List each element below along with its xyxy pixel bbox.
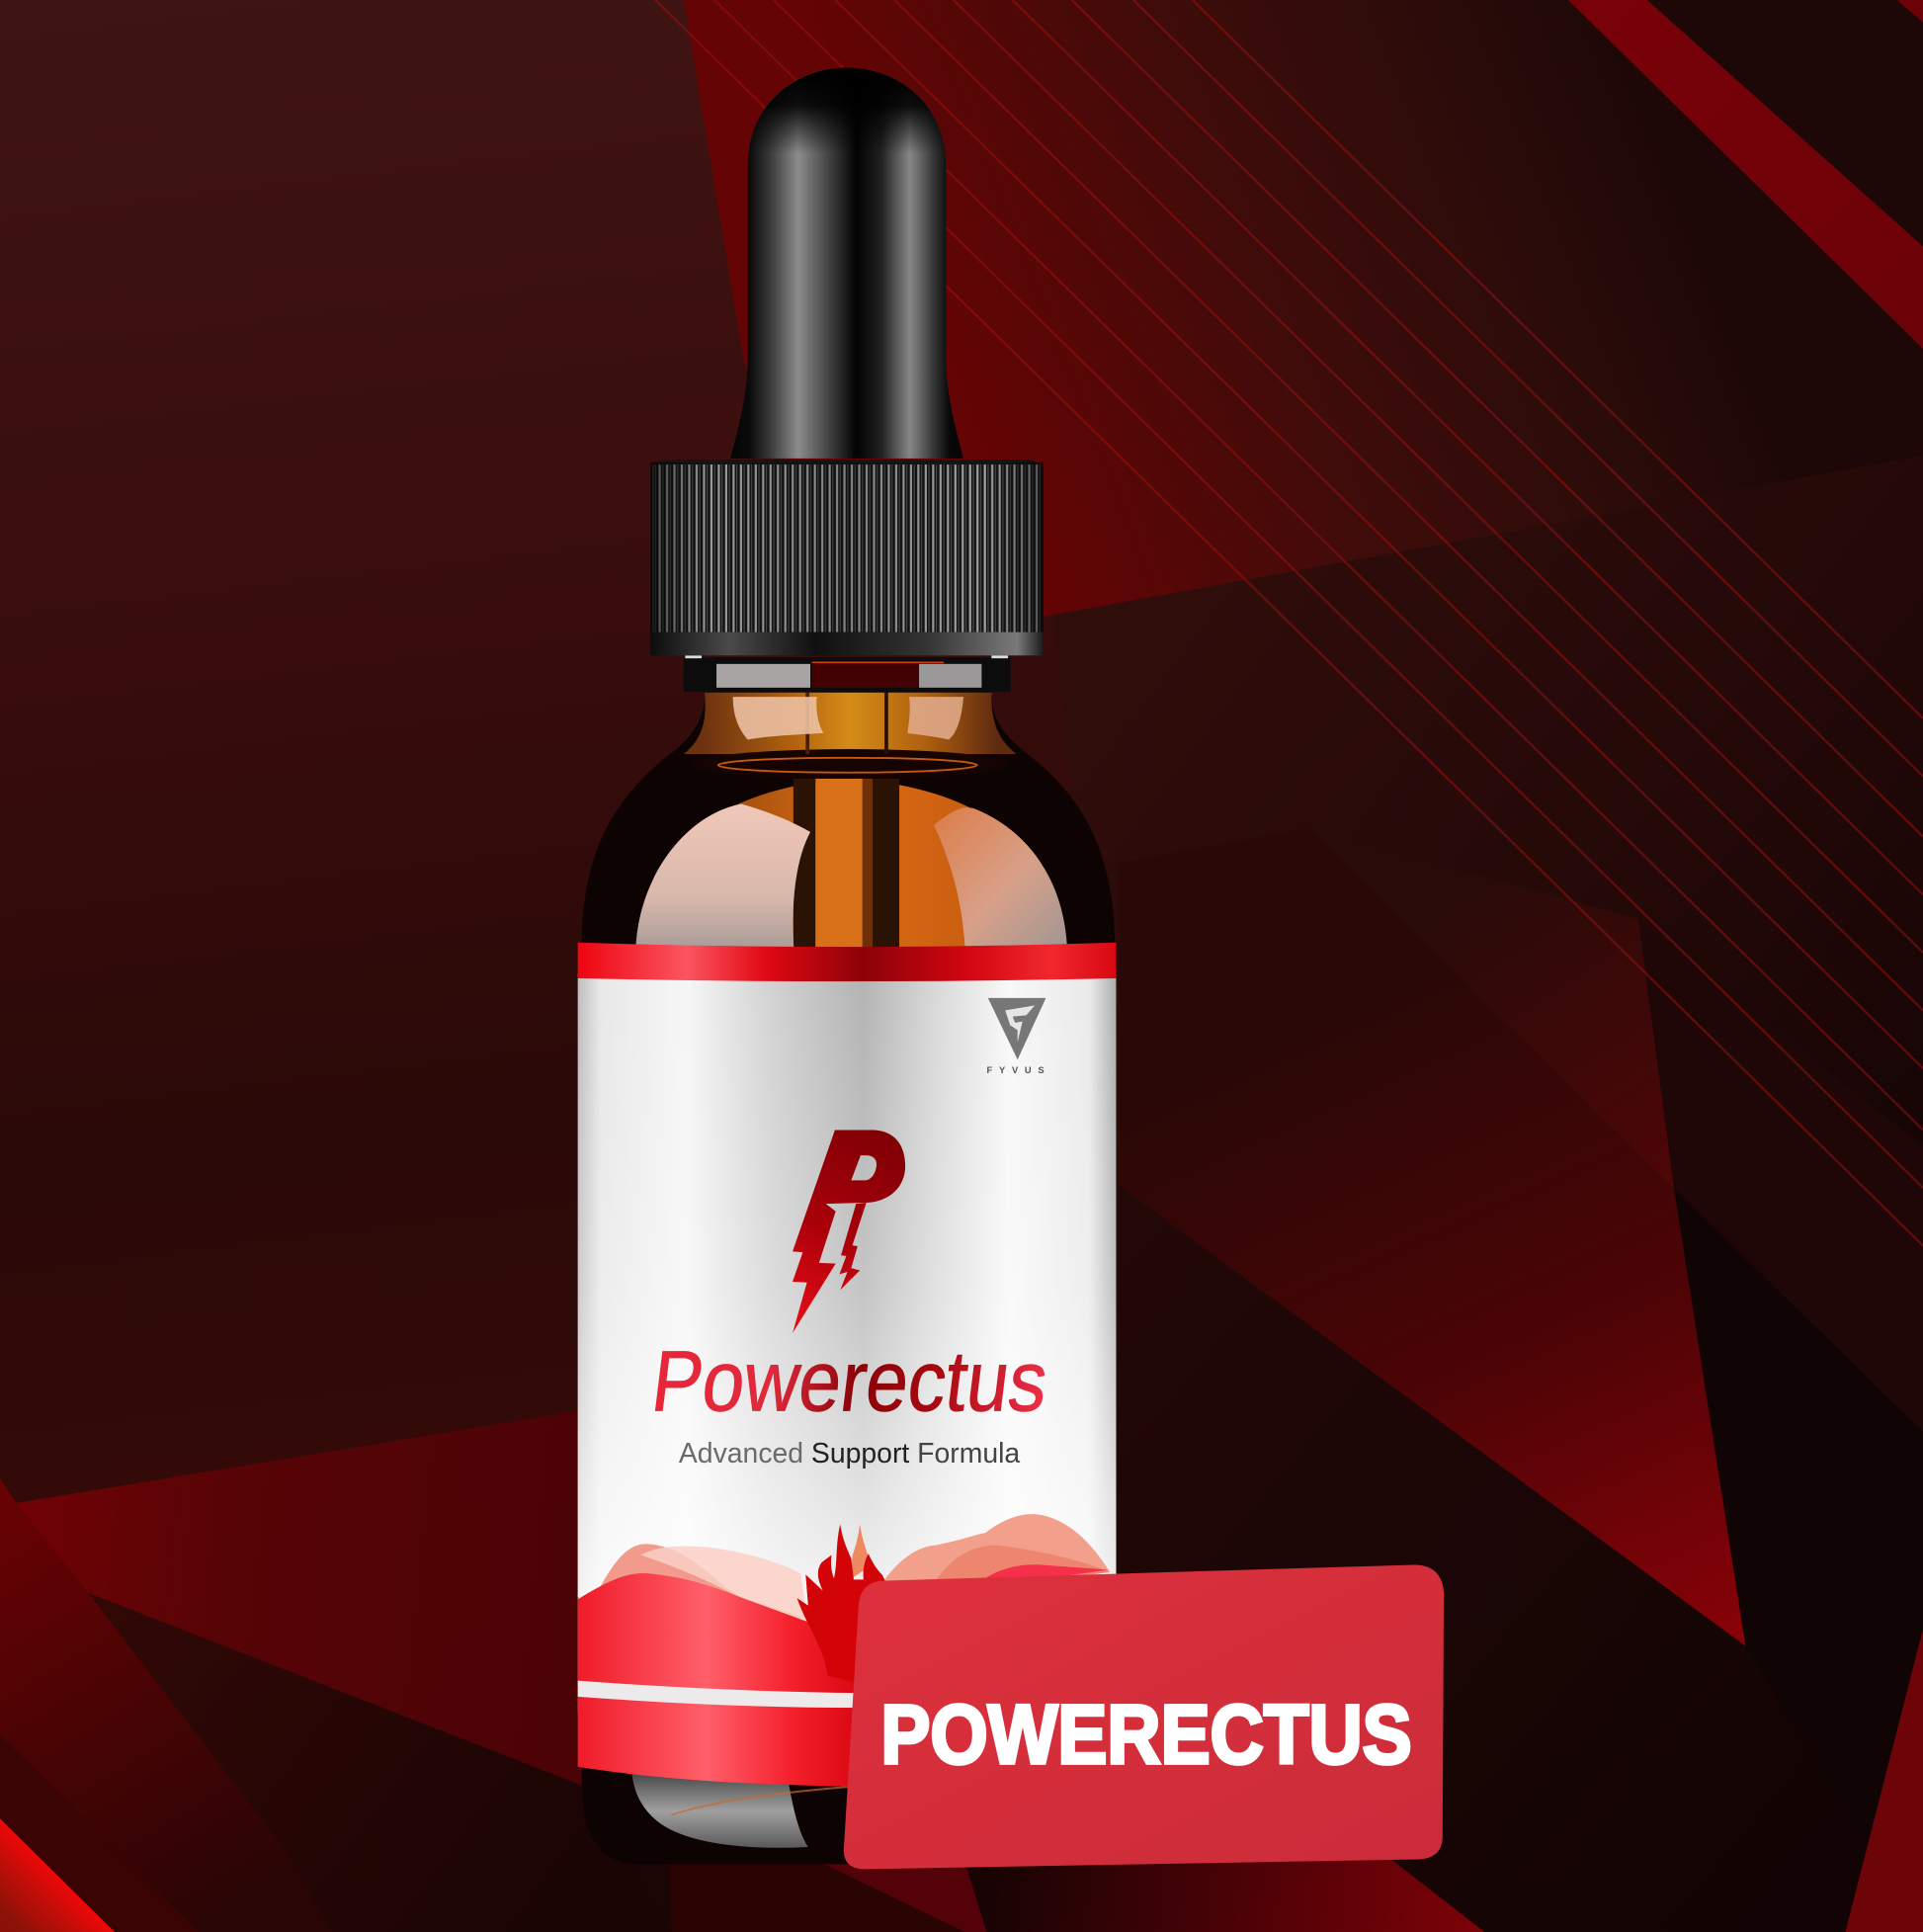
top right red band (1568, 0, 1923, 349)
pale waves (599, 1514, 1110, 1638)
bottom left corner red (0, 1818, 115, 1932)
bottom centre facets (669, 1858, 1484, 1932)
top red band (578, 943, 1116, 981)
dropper bulb (730, 68, 963, 459)
top right corner red (1897, 0, 1923, 22)
top red facet (684, 0, 1923, 640)
right dark facet (1638, 919, 1923, 1432)
red card (844, 1564, 1444, 1869)
white stripe (578, 1681, 863, 1708)
glass body (581, 688, 1115, 1864)
ribbed cap (650, 460, 1044, 655)
brand mark FYVUS (987, 998, 1050, 1075)
bottom left dark facet (89, 1593, 671, 1932)
flame (797, 1524, 889, 1691)
lower right dark facet (1674, 1189, 1923, 1932)
red lower wave (578, 1573, 863, 1787)
upper red triangle (1309, 828, 1674, 1189)
bottle (578, 68, 1116, 1864)
glass highlights (635, 697, 1067, 949)
diagonal lines (655, 0, 1923, 1246)
neck ring (684, 655, 1011, 692)
bottom left band (0, 1735, 199, 1932)
base highlight (632, 1774, 808, 1848)
product name: Powerectus (647, 1333, 1053, 1430)
central red triangle (1119, 828, 1745, 1646)
lower dark facet (1115, 1185, 1923, 1932)
dropper tube (794, 693, 899, 949)
bottom left red facet (0, 1411, 591, 1789)
bottom right red (1845, 1629, 1923, 1932)
tagline: Advanced Support Formula (679, 1438, 1020, 1470)
P lightning logo (793, 1130, 905, 1333)
silver label panel (578, 973, 1116, 1713)
brand mark FYVUS: FYVUS (987, 1065, 1050, 1075)
bottom left side facet (0, 1478, 333, 1932)
label (578, 943, 1116, 1787)
card title: POWERECTUS (880, 1687, 1412, 1781)
